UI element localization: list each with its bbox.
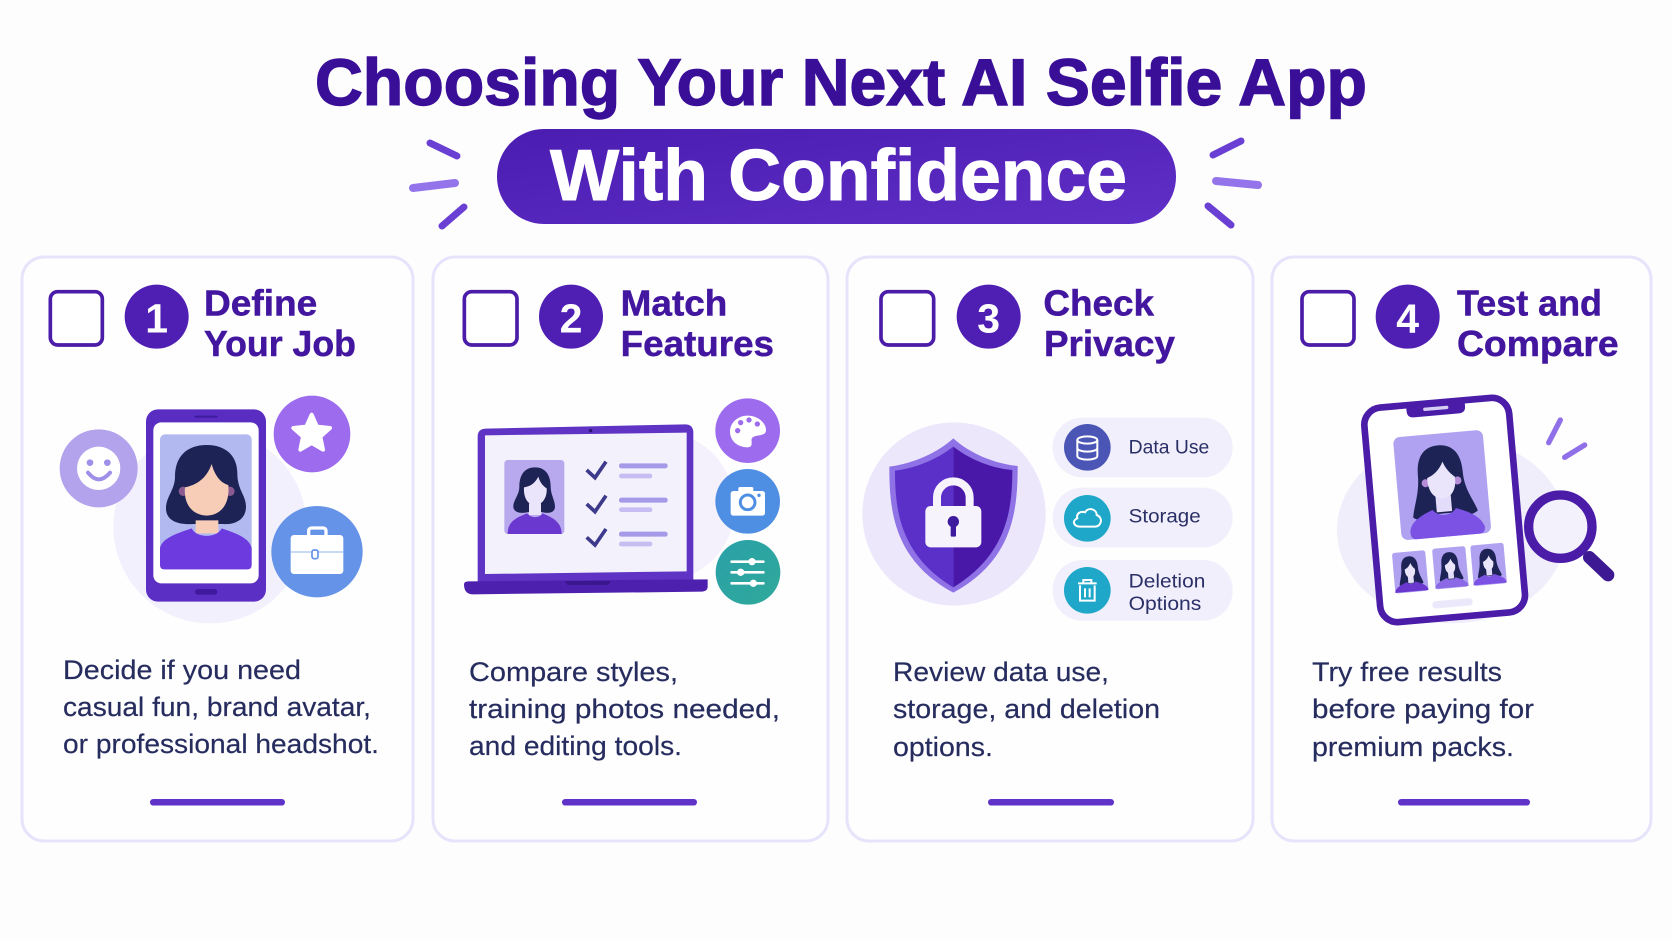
icon: left accent rays <box>413 143 464 226</box>
subtitle pill: With Confidence <box>550 136 1127 216</box>
illustration: phone with photo comparison and magnifier <box>1337 396 1608 624</box>
heading: Features <box>621 323 774 364</box>
heading: Compare <box>1457 323 1619 364</box>
description: or professional headshot. <box>63 729 379 759</box>
number badge 3: 3 <box>977 295 1000 341</box>
illustration: shield with padlock <box>862 422 1046 606</box>
description: and editing tools. <box>469 731 682 761</box>
heading: Test and <box>1457 283 1602 324</box>
description: Try free results <box>1312 657 1502 687</box>
checkbox <box>464 292 517 345</box>
description: Review data use, <box>893 657 1109 687</box>
accent bar <box>988 799 1114 806</box>
number badge 2 <box>539 285 603 349</box>
number badge 4 <box>1376 285 1440 349</box>
main portrait <box>1393 430 1491 541</box>
phone <box>1363 396 1526 624</box>
thumbnail 3 <box>1470 543 1507 586</box>
heading <box>1043 283 1175 364</box>
description: Compare styles, <box>469 657 678 687</box>
panel: step 4 test and compare <box>1272 257 1651 841</box>
list item: storage <box>1053 488 1233 547</box>
panel: step 2 match features <box>433 257 828 841</box>
illustration: phone with selfie and icons <box>60 396 363 623</box>
list item: deletion options: Options <box>1129 594 1201 615</box>
icon: camera <box>715 469 780 534</box>
icon: right accent rays <box>1208 141 1258 225</box>
heading <box>1457 283 1619 364</box>
heading: Check <box>1043 283 1155 324</box>
description: storage, and deletion <box>893 694 1160 724</box>
phone <box>146 409 266 602</box>
icon: sliders <box>716 540 780 605</box>
icon: magnifier <box>1529 495 1608 575</box>
title: Choosing Your Next AI Selfie App <box>315 45 1367 119</box>
heading: Define <box>204 283 317 324</box>
description <box>893 657 1160 762</box>
thumbnail 1 <box>1392 550 1429 594</box>
list item: data use: Data Use <box>1129 437 1209 458</box>
heading: Privacy <box>1044 323 1175 364</box>
number badge 1 <box>125 285 189 349</box>
icon: star <box>274 396 350 472</box>
checkbox <box>1302 292 1354 345</box>
number badge 3 <box>957 285 1021 349</box>
description <box>63 655 379 759</box>
laptop <box>464 424 708 594</box>
panel: step 3 check privacy <box>847 257 1253 841</box>
description: before paying for <box>1312 694 1534 724</box>
checkbox <box>881 292 934 345</box>
checklist <box>587 462 668 546</box>
heading: Your Job <box>204 323 356 364</box>
number badge 2: 2 <box>560 295 582 341</box>
checkbox <box>50 292 102 345</box>
heading: Match <box>621 283 727 324</box>
description: options. <box>893 732 993 762</box>
accent bar <box>1398 799 1530 806</box>
accent bar <box>562 799 697 806</box>
icon: smiley <box>60 429 138 507</box>
number badge 4: 4 <box>1396 295 1419 341</box>
accent bar <box>150 799 285 806</box>
icon: sparkle ticks <box>1549 420 1585 457</box>
list item: deletion options: Deletion <box>1129 571 1205 592</box>
thumbnail 2 <box>1432 546 1469 589</box>
description: training photos needed, <box>469 694 780 724</box>
description: Decide if you need <box>63 655 301 685</box>
description: premium packs. <box>1312 732 1514 762</box>
description: casual fun, brand avatar, <box>63 692 371 722</box>
list item: storage: Storage <box>1129 506 1201 527</box>
number badge 1: 1 <box>145 295 168 341</box>
description <box>1312 657 1534 762</box>
heading <box>204 283 356 364</box>
list item: deletion options <box>1053 560 1233 621</box>
description <box>469 657 780 761</box>
list item: data use <box>1053 418 1233 477</box>
icon: palette <box>715 398 780 463</box>
panel: step 1 define your job <box>22 257 413 841</box>
icon: briefcase <box>271 506 363 597</box>
profile photo <box>504 460 564 534</box>
heading <box>621 283 774 364</box>
illustration: laptop with checklist <box>464 398 780 605</box>
